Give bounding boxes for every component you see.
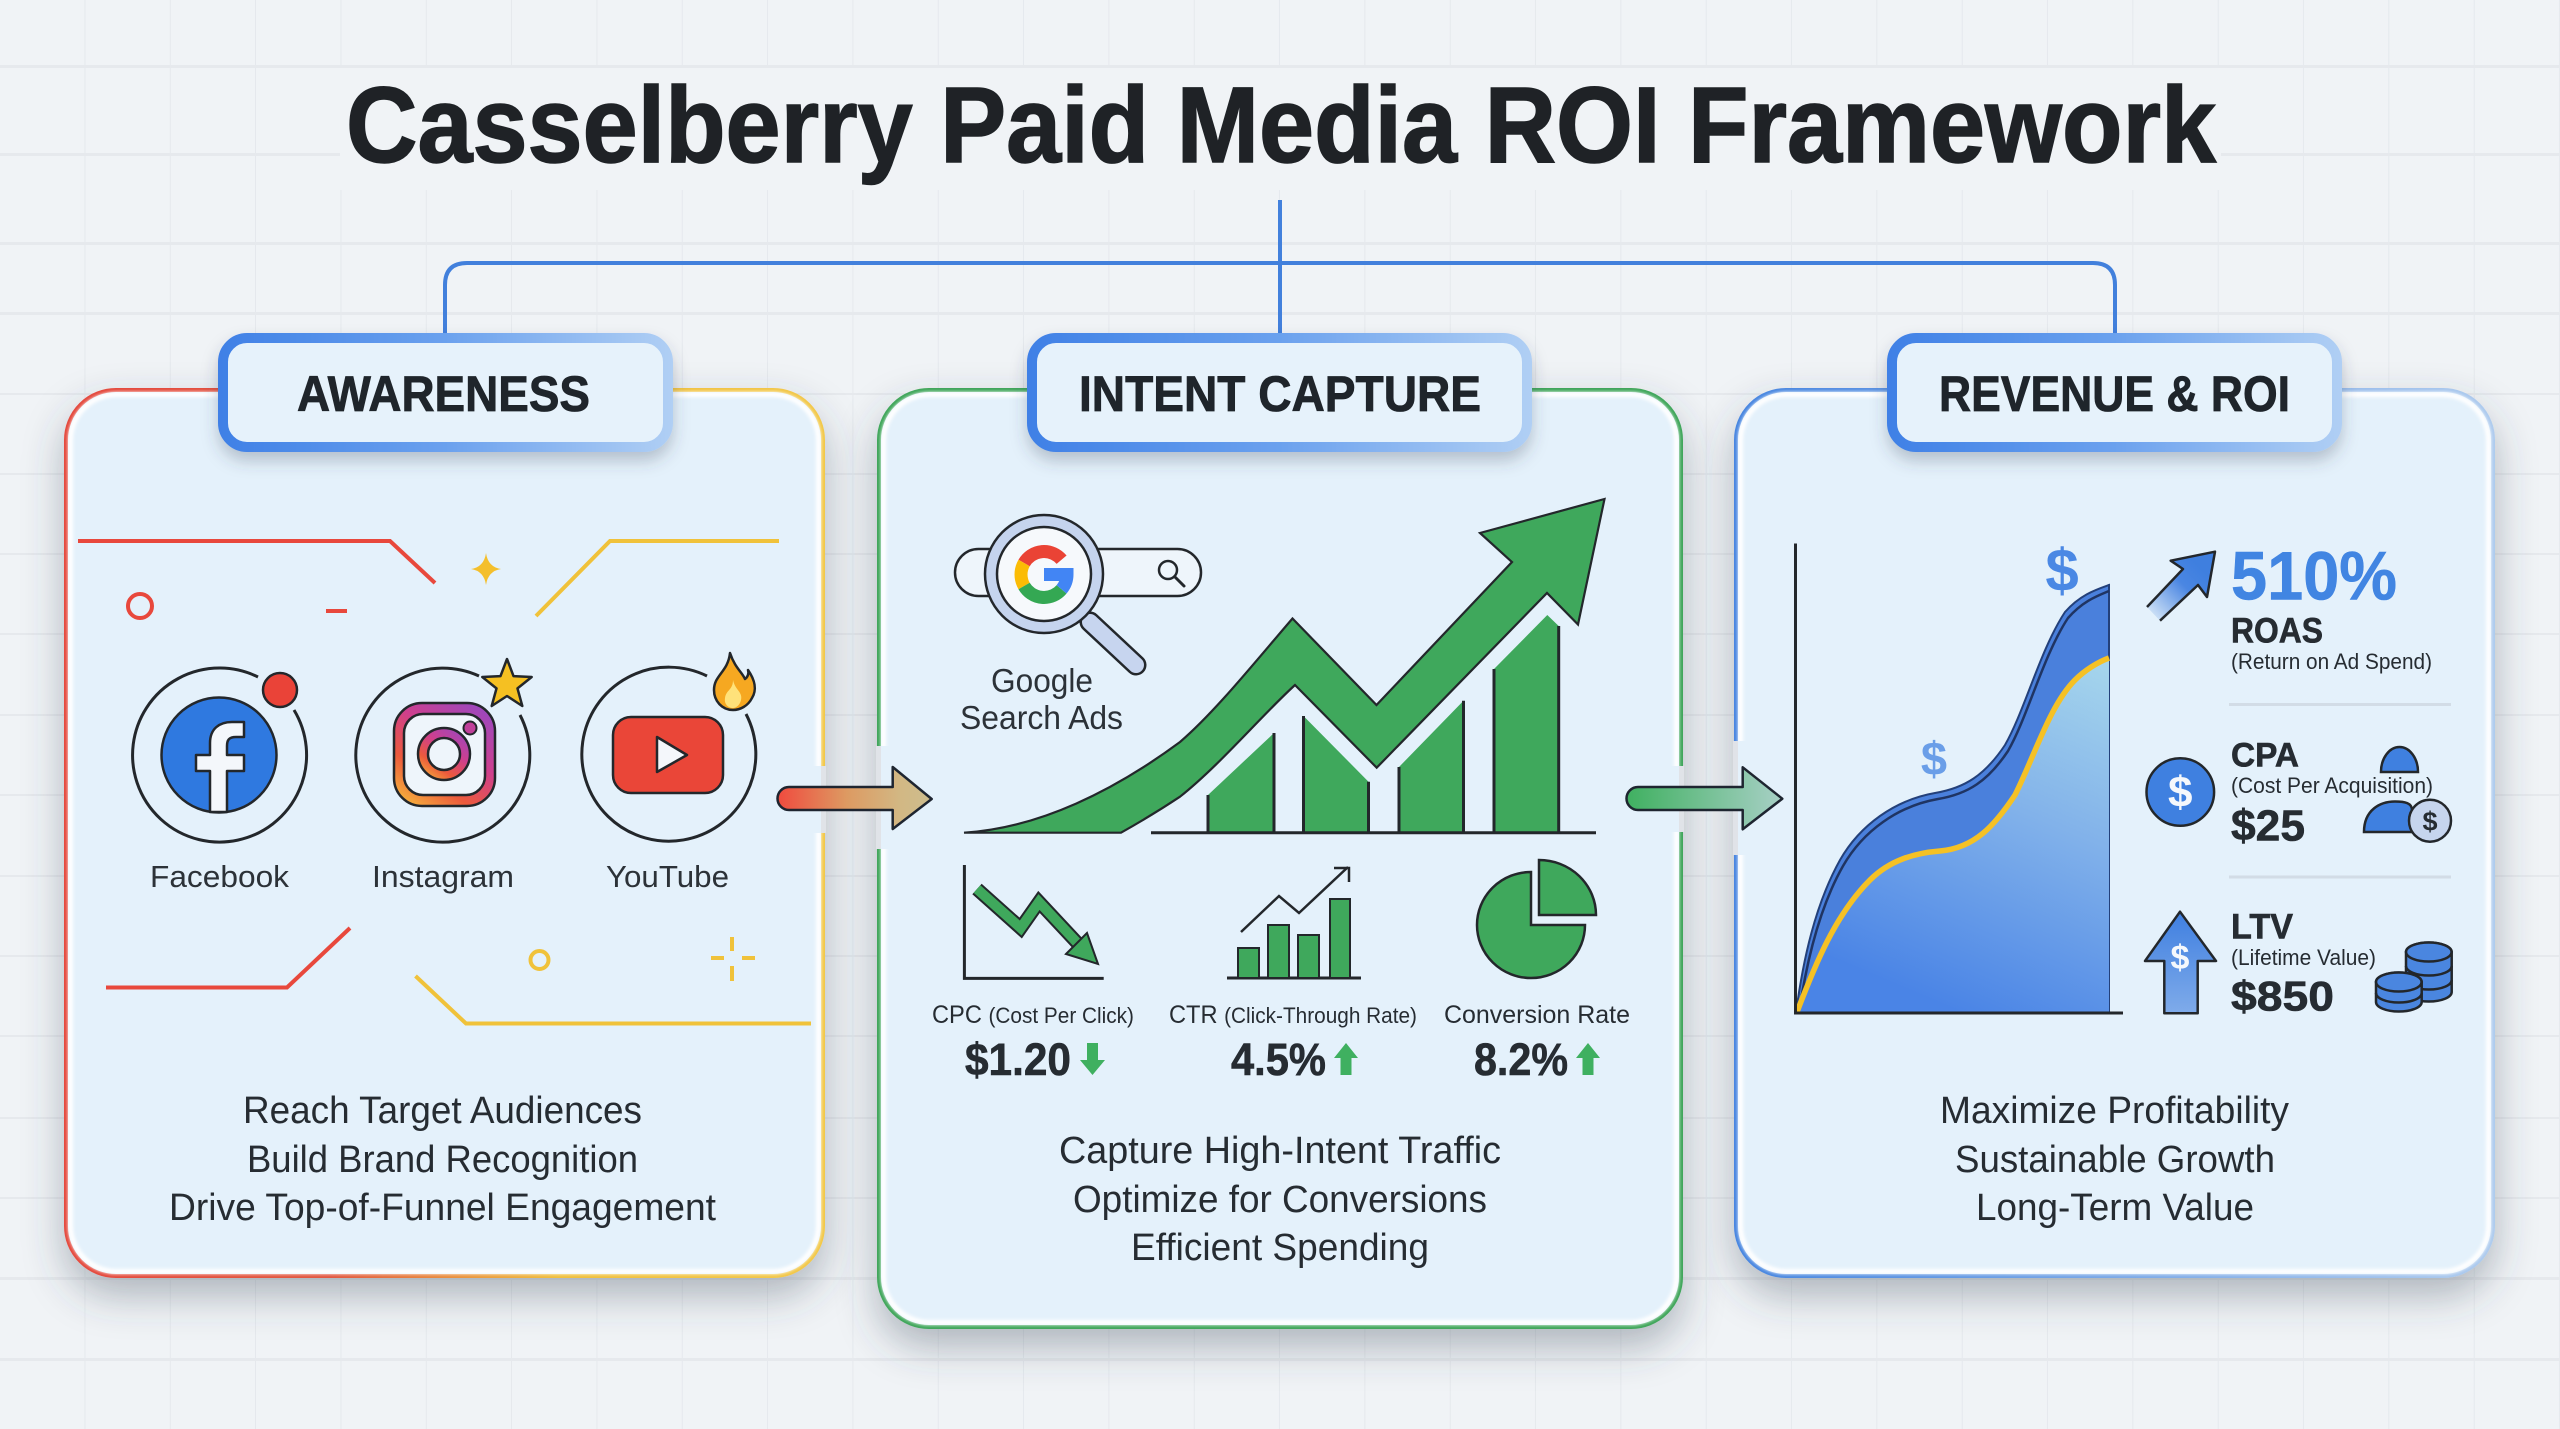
metric: roas: ROAS: [2231, 612, 2323, 650]
text block: intent goals: [1059, 1130, 1501, 1269]
metric: cpa: [2146, 737, 2451, 851]
metric: conversion rate: Conversion Rate: [1444, 1001, 1630, 1029]
metric: cpa: $: [2422, 806, 2438, 836]
metric: cpa: $: [2168, 768, 2193, 817]
header: revenue and roi: REVENUE & ROI: [1939, 366, 2290, 422]
text block: awareness goals: Build Brand Recognition: [247, 1139, 638, 1181]
connector lines from title to headers: [445, 200, 2115, 336]
text block: intent goals: Optimize for Conversions: [1073, 1179, 1487, 1221]
text block: awareness goals: Drive Top-of-Funnel Engagement: [169, 1187, 716, 1229]
panel: awareness: [66, 390, 826, 1276]
metric: cpa: $25: [2231, 802, 2305, 851]
text block: revenue goals: Long-Term Value: [1976, 1187, 2254, 1229]
text block: revenue goals: Maximize Profitability: [1940, 1090, 2289, 1132]
label: facebook: Facebook: [150, 859, 290, 894]
metric: roas: [2147, 538, 2432, 674]
icon: ctr rising bars: [1227, 867, 1361, 978]
panel: intent capture: [876, 390, 1684, 1327]
label: google search ads: Search Ads: [960, 699, 1123, 736]
metric: ctr: [1169, 1001, 1417, 1085]
icon: facebook: [133, 668, 307, 842]
label: youtube: YouTube: [606, 859, 729, 894]
metric: cpa: (Cost Per Acquisition): [2231, 773, 2433, 798]
header: awareness: [223, 338, 668, 447]
metric: ltv: [2145, 907, 2452, 1020]
label: instagram: Instagram: [372, 859, 514, 894]
label: google search ads: Google: [991, 662, 1093, 699]
metric: ctr: 4.5%: [1231, 1034, 1326, 1085]
chart: revenue growth area: $: [1921, 732, 1947, 785]
icon: cpc falling chart: [964, 865, 1104, 978]
metric: ltv: LTV: [2231, 907, 2294, 946]
text block: intent goals: Capture High-Intent Traffic: [1059, 1130, 1501, 1172]
metric: cpc: $1.20: [965, 1034, 1071, 1085]
decorative circuit lines: awareness: [78, 541, 811, 1024]
icon: conversion pie: [1477, 860, 1596, 978]
metric: roas: (Return on Ad Spend): [2231, 649, 2432, 674]
header: revenue and roi: [1892, 338, 2337, 447]
metric: cpc: [932, 1001, 1134, 1085]
title: Casselberry Paid Media ROI Framework: [346, 64, 2217, 185]
header: intent capture: INTENT CAPTURE: [1079, 366, 1481, 422]
metric: ltv: (Lifetime Value): [2231, 945, 2376, 970]
icon: instagram: [356, 659, 532, 842]
chart: growth arrow with bars: [964, 499, 1604, 833]
metric: cpc: CPC (Cost Per Click): [932, 1001, 1134, 1029]
chart: revenue growth area: [1796, 537, 2123, 1013]
panel: revenue and roi: [1733, 390, 2493, 1276]
metric: ltv: $: [2171, 939, 2190, 977]
arrow: awareness to intent: [778, 767, 932, 829]
header: intent capture: [1032, 338, 1527, 447]
metric: cpa: CPA: [2231, 737, 2299, 775]
metric: ltv: $850: [2231, 973, 2334, 1020]
chart: revenue growth area: $: [2045, 537, 2079, 604]
icon: google search magnifier: [955, 515, 1201, 665]
arrow: intent to revenue: [1626, 767, 1782, 829]
metric: conversion rate: 8.2%: [1474, 1034, 1568, 1085]
header: awareness: AWARENESS: [297, 366, 590, 422]
text block: revenue goals: Sustainable Growth: [1955, 1139, 2275, 1181]
label: google search ads: [960, 662, 1123, 736]
text block: revenue goals: [1940, 1090, 2289, 1229]
metric: roas: 510%: [2231, 538, 2397, 614]
text block: awareness goals: Reach Target Audiences: [243, 1090, 642, 1132]
metric: conversion rate: [1444, 1001, 1630, 1085]
text block: intent goals: Efficient Spending: [1131, 1227, 1429, 1269]
metric: ctr: CTR (Click-Through Rate): [1169, 1001, 1417, 1029]
text block: awareness goals: [169, 1090, 716, 1229]
icon: youtube: [582, 653, 756, 841]
